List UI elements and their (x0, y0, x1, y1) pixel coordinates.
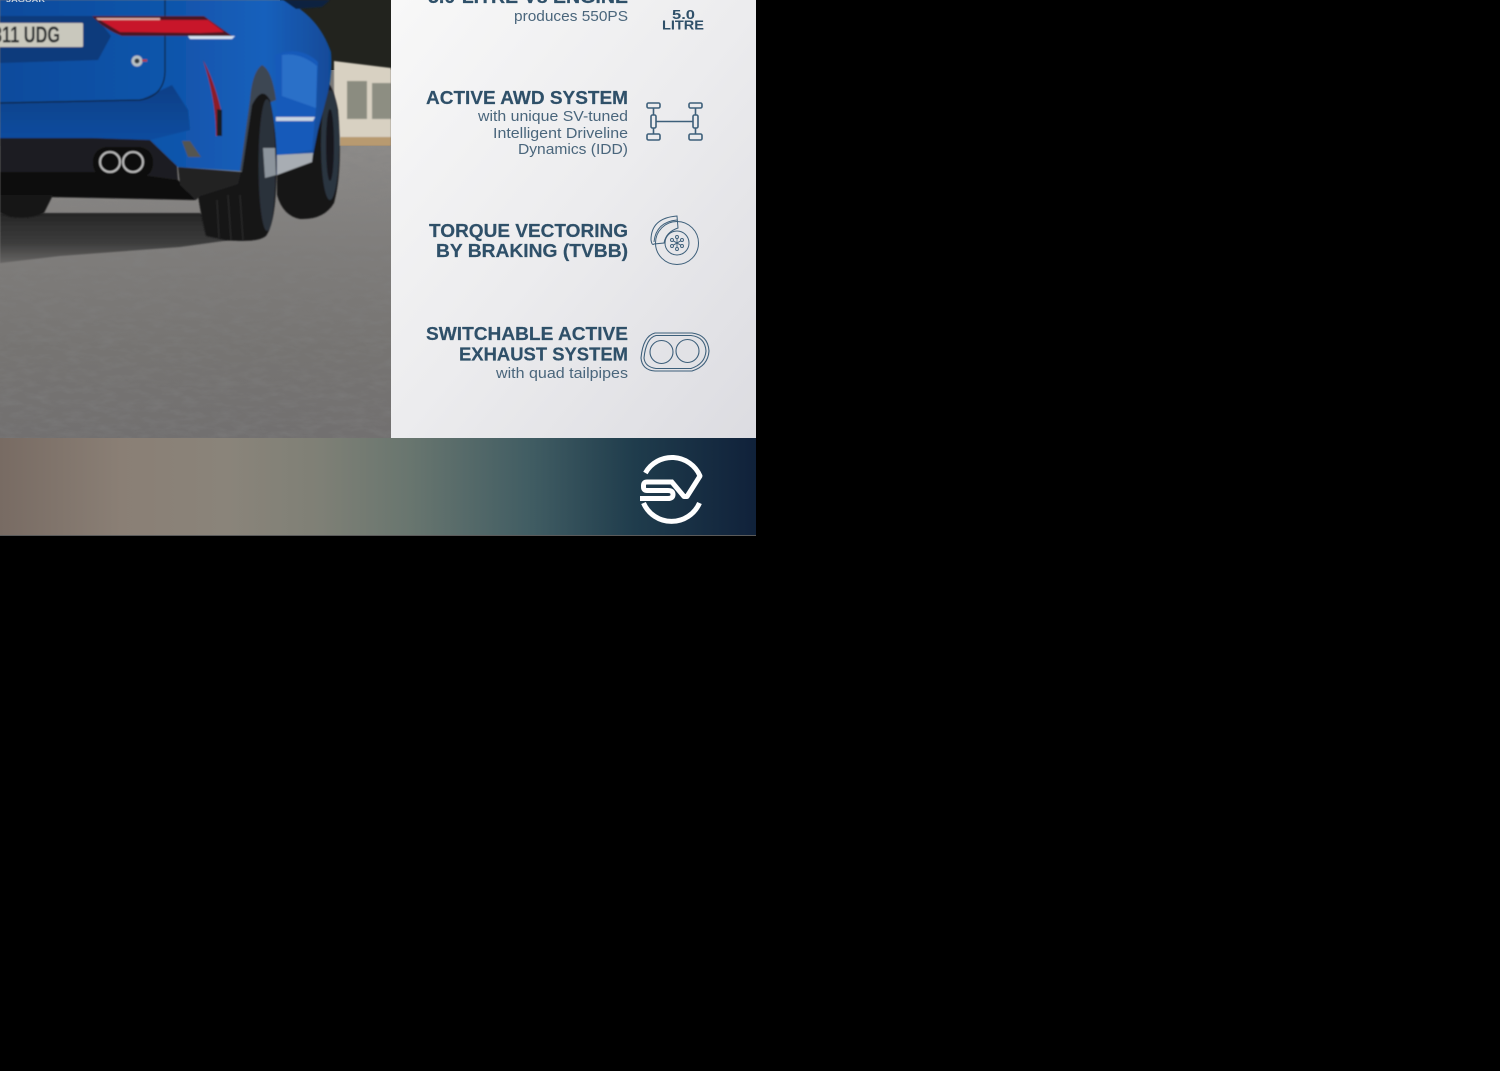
near rear wheel (196, 94, 277, 241)
roof dark shape at top (283, 0, 330, 9)
icon: AWD drivetrain (647, 103, 702, 140)
lower bumper (0, 138, 196, 200)
car shadow (0, 213, 245, 263)
feature: active AWD text: with unique SV-tuned (477, 108, 628, 125)
feature: torque vectoring text: TORQUE VECTORING (429, 221, 628, 241)
feature: exhaust text: with quad tailpipes (495, 365, 628, 382)
rear mudflap (178, 167, 241, 200)
far rear wheel (277, 70, 340, 219)
body (0, 0, 331, 175)
feature: active AWD text: ACTIVE AWD SYSTEM (426, 88, 628, 108)
road surface (0, 146, 391, 438)
panel: features (391, 0, 756, 438)
icon: 5.0 litre (662, 7, 704, 32)
feature: torque vectoring text: BY BRAKING (TVBB) (436, 241, 628, 261)
feature: active AWD text (426, 88, 628, 158)
tailgate cut line (0, 0, 165, 103)
SV logo (640, 457, 700, 521)
icon: brake disc (651, 216, 698, 264)
side reflection (282, 54, 317, 108)
top arc and V (645, 457, 700, 496)
tail light (92, 16, 232, 36)
exhaust tips (100, 152, 143, 172)
feature: exhaust text: SWITCHABLE ACTIVE (426, 324, 628, 344)
S letter (640, 482, 673, 498)
feature: exhaust text (426, 324, 628, 382)
dark background trees (280, 0, 391, 70)
side sill (277, 153, 313, 175)
lower rear panel shade (0, 85, 190, 140)
tailgate recess (0, 16, 111, 63)
icon: 5.0 litre: 5.0 (672, 7, 695, 22)
feature: exhaust text: EXHAUST SYSTEM (459, 344, 628, 364)
SV badge (132, 56, 147, 66)
footer band (0, 438, 756, 536)
icon: 5.0 litre: LITRE (662, 18, 704, 32)
bottom arc (644, 503, 700, 521)
feature: active AWD text: Dynamics (IDD) (518, 141, 628, 158)
feature: engine text: produces 550PS (514, 8, 628, 25)
feature: engine text (428, 0, 628, 25)
icon: quad tailpipes (641, 333, 709, 371)
inner rear-left wheel (0, 195, 53, 218)
rear wheel arch (240, 65, 276, 172)
feature: torque vectoring text (429, 221, 628, 261)
side marker (182, 141, 201, 157)
exhaust surround (93, 147, 153, 178)
bridge wall (334, 61, 391, 146)
rear reflector (203, 60, 221, 136)
side panel (275, 51, 318, 155)
photo: blue car on road (0, 0, 391, 438)
car (0, 0, 340, 241)
feature: active AWD text: Intelligent Driveline (493, 125, 628, 142)
